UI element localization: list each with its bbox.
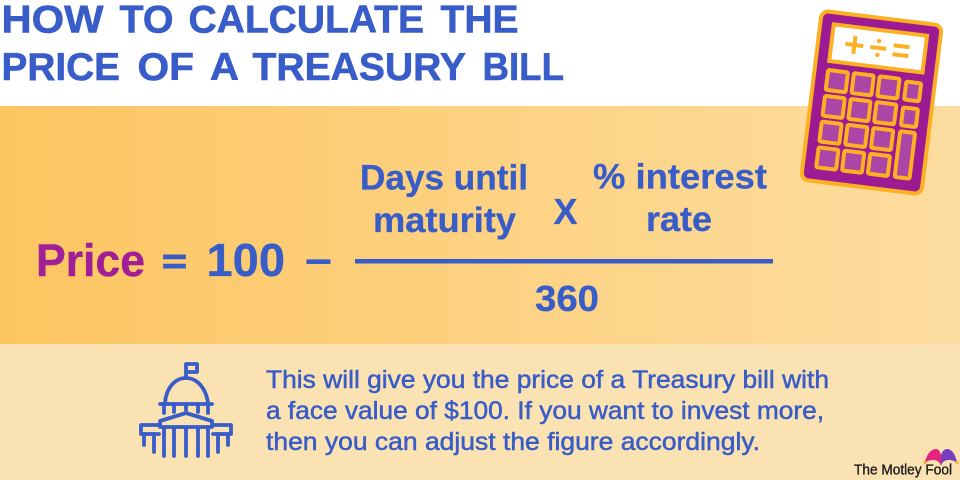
numerator: interest rate: % interest — [593, 158, 767, 196]
background: footer band — [0, 344, 960, 480]
icon: calculator — [801, 11, 942, 194]
numerator: days until maturity — [360, 158, 528, 240]
title: OF — [138, 46, 194, 89]
background: formula band — [0, 106, 960, 344]
icon: capitol building — [141, 364, 231, 456]
title — [2, 0, 564, 89]
equals sign: = — [162, 243, 187, 281]
number: 100: 100 — [206, 234, 285, 286]
title: PRICE — [2, 46, 120, 89]
explanatory text: This will give you the price of a Treasury bill with — [266, 366, 829, 394]
title: BILL — [482, 46, 564, 89]
numerator: interest rate: rate — [646, 200, 712, 239]
title: A — [210, 46, 239, 89]
minus sign: – — [305, 232, 332, 284]
multiply sign: X — [554, 191, 578, 232]
calculator buttons — [816, 70, 921, 179]
explanatory text — [266, 366, 829, 456]
label: price: Price — [36, 235, 145, 286]
explanatory text: a face value of $100. If you want to invest more, — [266, 397, 824, 425]
calculator display — [829, 24, 927, 72]
jester hat — [923, 449, 959, 466]
logo: The Motley Fool — [854, 449, 959, 478]
explanatory text: then you can adjust the figure accordingly. — [266, 428, 760, 456]
logo: The Motley Fool: The Motley Fool — [854, 462, 952, 478]
title: TREASURY — [252, 46, 466, 89]
fraction line — [355, 259, 773, 264]
denominator: 360 — [535, 278, 599, 319]
formula — [36, 158, 773, 319]
numerator: days until maturity: maturity — [373, 201, 517, 240]
numerator: interest rate — [593, 158, 767, 239]
numerator: days until maturity: Days until — [360, 158, 528, 198]
